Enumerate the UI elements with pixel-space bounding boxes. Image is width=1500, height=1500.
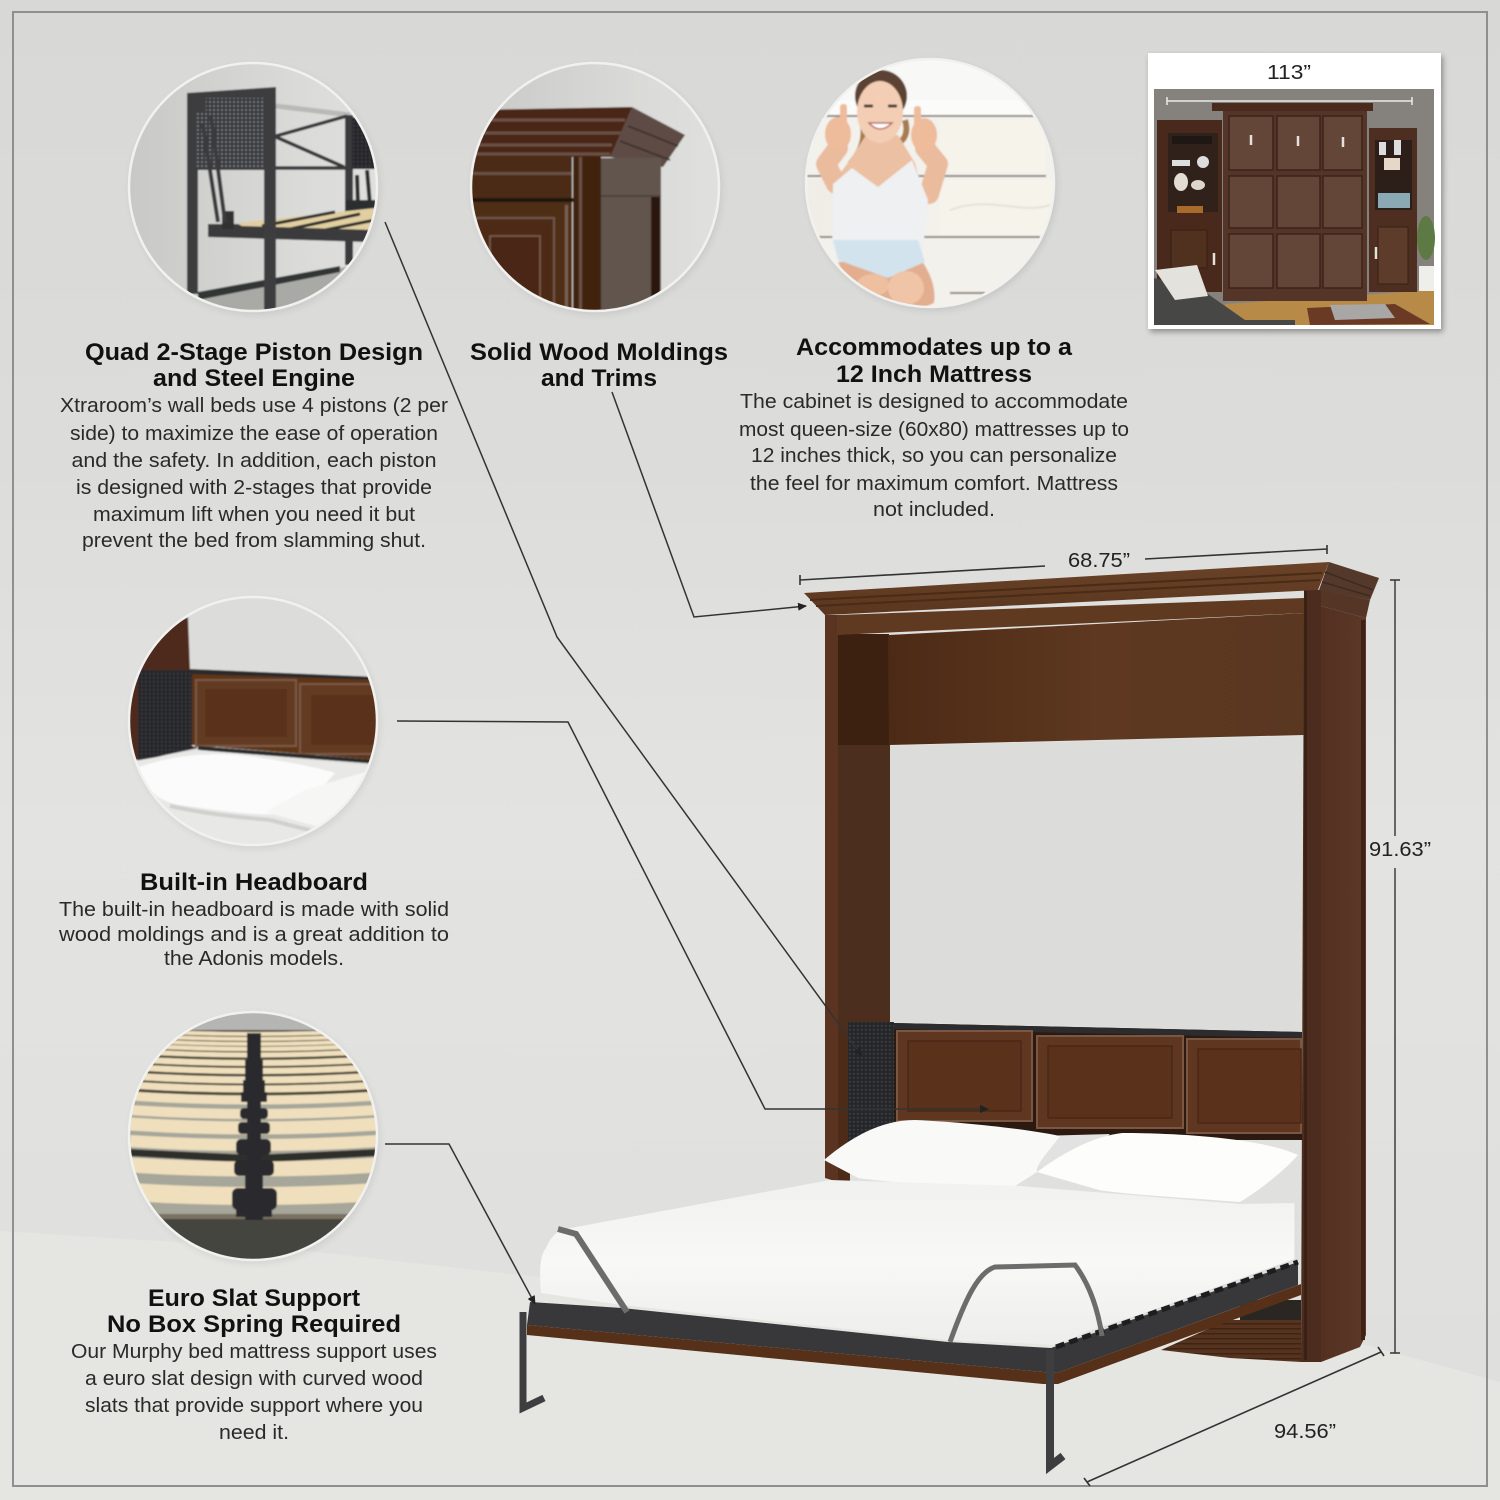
hair [854, 69, 908, 110]
text block: a euro slat design with curved wood [85, 1367, 423, 1390]
dimension: 68.75 inch [800, 545, 1327, 585]
heading [470, 339, 728, 392]
bed legs [523, 1312, 544, 1408]
cabinet left inner side [838, 634, 889, 745]
text block: not included. [873, 498, 995, 521]
dimension: 91.63 inch [1369, 580, 1431, 1353]
width line [1167, 97, 1412, 105]
frieze [837, 598, 1304, 635]
headboard [848, 1022, 1302, 1140]
heading: and Steel Engine [153, 365, 355, 392]
arrow: piston to engine [385, 222, 862, 1056]
shorts [833, 240, 925, 278]
icon: wood molding [470, 62, 720, 318]
arms and hands [826, 148, 838, 184]
dimension: 68.75 inch: 68.75” [1068, 550, 1130, 572]
dimension: 91.63 inch: 91.63” [1369, 839, 1431, 861]
text block: slats that provide support where you [85, 1394, 423, 1417]
wood rail under frame [527, 1284, 1301, 1384]
heading: Quad 2-Stage Piston Design [85, 339, 423, 366]
text block: most queen-size (60x80) mattresses up to [739, 418, 1129, 441]
tank top [832, 160, 928, 250]
panel: 113 inch wide wall unit photo [1148, 53, 1441, 329]
text block: 12 inches thick, so you can personalize [751, 444, 1117, 467]
dimension: 113 inch: 113” [1267, 62, 1311, 84]
murphy bed illustration [523, 562, 1379, 1466]
mattress straps [558, 1229, 627, 1312]
legs and feet [838, 258, 934, 307]
panel: euro slat [71, 1010, 437, 1444]
heading: No Box Spring Required [107, 1311, 401, 1338]
text block: Xtraroom’s wall beds use 4 pistons (2 per [60, 394, 448, 417]
pistons [203, 116, 225, 222]
mattress [540, 1180, 1296, 1345]
heading: 12 Inch Mattress [836, 361, 1032, 388]
right bookcase [1369, 128, 1417, 292]
panel: moldings [470, 62, 728, 392]
wood panels [192, 674, 378, 760]
text block: side) to maximize the ease of operation [70, 422, 438, 445]
icon: woman on mattress [805, 58, 1055, 308]
text block: the feel for maximum comfort. Mattress [750, 472, 1118, 495]
heading: Built-in Headboard [140, 869, 368, 896]
arrow: slats to frame [385, 1144, 535, 1304]
text block: The cabinet is designed to accommodate [740, 390, 1128, 413]
text block [739, 390, 1129, 521]
table [1307, 304, 1430, 325]
arrow: headboard [397, 721, 988, 1109]
neck and chest [840, 134, 918, 188]
center cabinet [1223, 107, 1367, 301]
bed area [137, 749, 367, 844]
floor rail [198, 266, 340, 300]
icon: slats closeup [128, 1010, 380, 1264]
text block [60, 394, 448, 552]
photo wall [1154, 89, 1434, 325]
arrow: moldings to crown [612, 392, 806, 617]
cabinet right post [1301, 590, 1321, 1362]
top rail [190, 669, 378, 682]
heading: Euro Slat Support [148, 1285, 360, 1312]
text block: The built-in headboard is made with solid [59, 898, 449, 921]
rear frame [276, 106, 350, 115]
mattress side shading [1060, 1203, 1296, 1345]
icon: headboard closeup [128, 596, 378, 850]
lower rail [198, 746, 378, 764]
pillow [136, 754, 335, 814]
heading: Accommodates up to a [796, 334, 1073, 361]
heading [107, 1285, 401, 1338]
panel: mattress [739, 58, 1129, 521]
panel: piston design [60, 60, 448, 552]
face [857, 81, 903, 143]
heading [85, 339, 423, 392]
wall opening [890, 736, 1304, 1032]
text block [58, 898, 449, 970]
slats [238, 208, 378, 232]
front plate [187, 87, 276, 170]
second pillow [278, 772, 364, 826]
slat ends [1056, 1262, 1298, 1347]
heading: Solid Wood Moldings [470, 339, 728, 366]
text block: prevent the bed from slamming shut. [82, 529, 426, 552]
photo floor [1225, 290, 1434, 325]
center spine [232, 1033, 277, 1220]
frieze and door [470, 157, 572, 200]
dimension: 94.56 inch: 94.56” [1274, 1421, 1336, 1443]
floor [0, 1231, 1500, 1500]
rear box under bed [1161, 1320, 1301, 1362]
text block: the Adonis models. [164, 947, 344, 970]
pilaster [573, 157, 601, 312]
text block: is designed with 2-stages that provide [76, 476, 432, 499]
plant [1417, 216, 1435, 260]
icon: steel piston mechanism [128, 60, 378, 315]
bed rail [208, 224, 375, 242]
panel: headboard [58, 596, 449, 970]
heading: and Trims [541, 365, 657, 392]
upper back panel [888, 613, 1305, 745]
crown front [470, 107, 632, 157]
crown return [610, 107, 685, 167]
text block: and the safety. In addition, each piston [72, 449, 436, 472]
side panel [601, 158, 661, 313]
cabinet left post front [825, 615, 838, 1182]
text block: maximum lift when you need it but [93, 503, 415, 526]
text block: wood moldings and is a great addition to [58, 923, 449, 946]
right pillow [1037, 1133, 1298, 1202]
grille [138, 670, 198, 762]
left bookcase [1157, 120, 1222, 292]
text block: need it. [219, 1421, 289, 1444]
bed frame [527, 1262, 1298, 1373]
left pillow [824, 1120, 1060, 1186]
fabric behind pillows [1000, 1134, 1110, 1180]
crown molding [804, 562, 1329, 615]
text block: Our Murphy bed mattress support uses [71, 1340, 437, 1363]
sofa [1154, 278, 1295, 325]
dimension: 94.56 inch [1084, 1347, 1384, 1486]
heading [796, 334, 1073, 388]
text block [71, 1340, 437, 1444]
